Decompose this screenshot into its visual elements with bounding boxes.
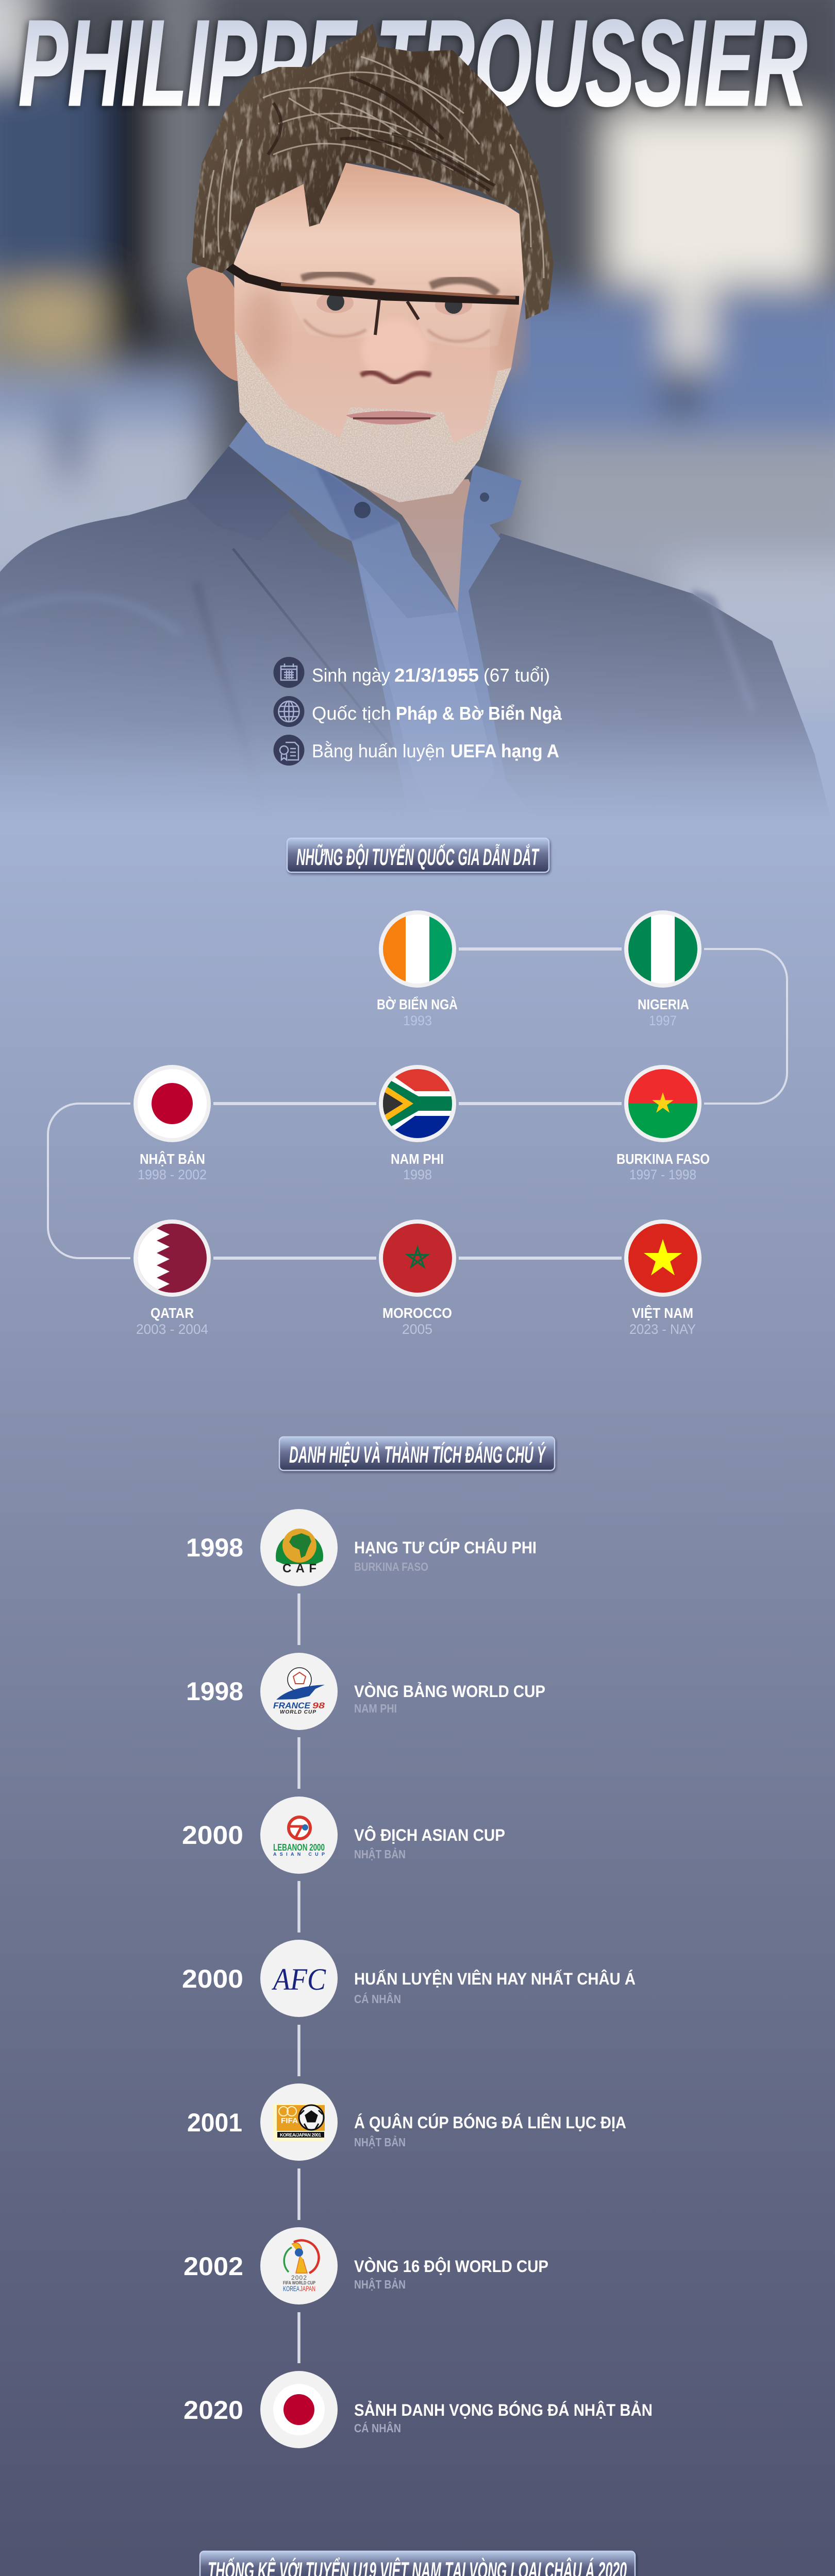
team: Vietnam: VIỆT NAM bbox=[632, 1305, 693, 1321]
team: Morocco: MOROCCO bbox=[382, 1305, 452, 1321]
shirt bbox=[229, 417, 548, 835]
team: Ivory Coast: 1993 bbox=[403, 1013, 432, 1028]
logo: Lebanon 2000: LEBANON 2000 bbox=[273, 1842, 325, 1853]
bio: date of birth bbox=[273, 657, 550, 688]
heading: titles: DANH HIỆU VÀ THÀNH TÍCH ĐÁNG CHÚ Ý bbox=[289, 1442, 546, 1468]
entry: 1998 CAF: BURKINA FASO bbox=[354, 1560, 428, 1573]
team: Nigeria bbox=[624, 910, 702, 1028]
nose and mouth bbox=[361, 318, 428, 382]
team: Qatar: QATAR bbox=[151, 1305, 194, 1321]
team: South Africa: NAM PHI bbox=[391, 1151, 444, 1167]
logo: World Cup 2002: FIFA WORLD CUP bbox=[283, 2280, 315, 2285]
panel: U19 Vietnam statistics bbox=[199, 2550, 638, 2576]
entry: 1998 World Cup: VÒNG BẢNG WORLD CUP bbox=[354, 1682, 545, 1701]
entry: 2002 World Cup: VÒNG 16 ĐỘI WORLD CUP bbox=[354, 2257, 548, 2276]
entry: 2000 Asian Cup bbox=[182, 1797, 505, 1874]
hair bbox=[192, 24, 554, 319]
neck bbox=[361, 479, 490, 613]
logo: World Cup 2002: KOREA bbox=[283, 2284, 299, 2293]
logo: World Cup 2002: JAPAN bbox=[300, 2284, 315, 2293]
bio: coaching licence bbox=[273, 735, 559, 766]
entry: 2001 Confederations Cup: 2001 bbox=[187, 2108, 242, 2137]
heading: titles bbox=[279, 1437, 555, 1470]
bio: coaching licence: UEFA hạng A bbox=[450, 740, 559, 761]
heading: national teams: NHỮNG ĐỘI TUYỂN QUỐC GIA DẪN DẮT bbox=[296, 844, 540, 870]
logo: AFC: AFC bbox=[271, 1962, 326, 1996]
logo: FIFA Confederations Cup 2001: KOREA/JAPAN 2001 bbox=[280, 2132, 321, 2138]
team: Nigeria: NIGERIA bbox=[638, 996, 689, 1012]
fade into page background bbox=[0, 0, 835, 835]
logo: World Cup 2002: 2002 bbox=[291, 2274, 307, 2281]
entry: 2000 Asian Cup: NHẬT BẢN bbox=[354, 1846, 406, 1861]
ear bbox=[187, 267, 242, 381]
logo: CAF: CAF bbox=[282, 1562, 316, 1575]
team: Qatar: 2003 - 2004 bbox=[136, 1321, 208, 1337]
entry: 2000 AFC coach: CÁ NHÂN bbox=[354, 1992, 401, 2006]
logo: FIFA Confederations Cup 2001 bbox=[273, 2104, 325, 2141]
logo: World Cup 2002 bbox=[283, 2240, 319, 2293]
entry: 2000 AFC coach bbox=[182, 1940, 636, 2017]
team: Japan bbox=[133, 1065, 211, 1182]
eyebrows and eyes bbox=[302, 274, 374, 283]
jacket bbox=[0, 446, 835, 835]
bio: date of birth: 21/3/1955 bbox=[394, 665, 479, 686]
entry: 2000 AFC coach: HUẤN LUYỆN VIÊN HAY NHẤT CHÂU Á bbox=[354, 1970, 636, 1988]
panel: titles and achievements timeline bbox=[182, 1436, 653, 2448]
entry: 1998 CAF: 1998 bbox=[186, 1533, 243, 1562]
logo: Lebanon 2000: ASIAN CUP bbox=[273, 1852, 325, 1857]
entry: 1998 World Cup: 1998 bbox=[186, 1677, 243, 1706]
entry: 2020 Japan Hall of Fame: CÁ NHÂN bbox=[354, 2421, 401, 2435]
bio: nationality bbox=[273, 696, 562, 727]
bio: date of birth: (67 tuổi) bbox=[483, 665, 550, 686]
team: Ivory Coast: BỜ BIỂN NGÀ bbox=[377, 996, 458, 1012]
entry: 1998 World Cup bbox=[186, 1653, 545, 1730]
entry: 2002 World Cup: 2002 bbox=[183, 2252, 243, 2281]
logo: France 98: 98 bbox=[312, 1701, 325, 1710]
logo: France 98: WORLD CUP bbox=[280, 1709, 316, 1715]
team: Vietnam bbox=[624, 1219, 702, 1337]
entry: 2001 Confederations Cup: Á QUÂN CÚP BÓNG ĐÁ LIÊN LỤC ĐỊA bbox=[354, 2113, 626, 2132]
team: Burkina Faso bbox=[616, 1065, 710, 1182]
entry: 1998 CAF: HẠNG TƯ CÚP CHÂU PHI bbox=[354, 1538, 537, 1557]
entry: 2002 World Cup: NHẬT BẢN bbox=[354, 2277, 406, 2291]
team: Vietnam: 2023 - NAY bbox=[629, 1321, 696, 1337]
entry: 2020 Japan Hall of Fame: 2020 bbox=[183, 2396, 243, 2425]
beard bbox=[235, 330, 511, 502]
logo: France 98: FRANCE bbox=[273, 1701, 311, 1710]
entry: 2000 Asian Cup: 2000 bbox=[182, 1821, 243, 1850]
connector path bbox=[48, 949, 787, 1258]
face bbox=[234, 163, 524, 502]
entry: 2001 Confederations Cup bbox=[187, 2083, 626, 2161]
entry: 2000 AFC coach: 2000 bbox=[182, 1964, 243, 1993]
logo: FIFA Confederations Cup 2001: FIFA bbox=[281, 2116, 298, 2125]
logo: Japan flag bbox=[273, 2384, 325, 2435]
entry: 1998 World Cup: NAM PHI bbox=[354, 1702, 397, 1715]
heading: statistics bbox=[200, 2551, 635, 2576]
team: Morocco: 2005 bbox=[402, 1321, 432, 1337]
entry: 2020 Japan Hall of Fame bbox=[183, 2371, 653, 2448]
team: Burkina Faso: BURKINA FASO bbox=[616, 1151, 710, 1167]
panel: hero portrait with title and bio bbox=[0, 0, 835, 795]
logo: CAF bbox=[276, 1529, 323, 1575]
heading: national teams bbox=[287, 838, 549, 872]
team: Qatar bbox=[133, 1219, 211, 1337]
entry: 2020 Japan Hall of Fame: SẢNH DANH VỌNG BÓNG ĐÁ NHẬT BẢN bbox=[354, 2401, 653, 2419]
logo: Lebanon 2000 bbox=[273, 1817, 325, 1857]
bio: nationality: Pháp & Bờ Biển Ngà bbox=[396, 703, 562, 724]
glasses bbox=[225, 264, 519, 347]
timeline connectors bbox=[297, 1594, 300, 2363]
logo: France 98 bbox=[273, 1668, 325, 1715]
team: South Africa: 1998 bbox=[403, 1167, 432, 1182]
bio: coaching licence: Bằng huấn luyện bbox=[312, 740, 445, 761]
team: Nigeria: 1997 bbox=[649, 1013, 677, 1028]
panel: national teams coached bbox=[47, 838, 788, 1337]
team: Morocco bbox=[379, 1219, 456, 1337]
portrait: Philippe Troussier bbox=[0, 24, 835, 835]
bio: nationality: Quốc tịch bbox=[312, 703, 391, 724]
team: Burkina Faso: 1997 - 1998 bbox=[629, 1167, 696, 1182]
entry: 2002 World Cup bbox=[183, 2227, 548, 2304]
team: Ivory Coast bbox=[377, 910, 458, 1028]
entry: 2001 Confederations Cup: NHẬT BẢN bbox=[354, 2134, 406, 2149]
team: South Africa bbox=[379, 1065, 456, 1182]
entry: 2000 Asian Cup: VÔ ĐỊCH ASIAN CUP bbox=[354, 1826, 505, 1844]
team: Japan: NHẬT BẢN bbox=[140, 1150, 205, 1167]
bio: date of birth: Sinh ngày bbox=[312, 665, 390, 686]
blurred stadium background bbox=[0, 0, 835, 716]
entry: 1998 CAF bbox=[186, 1509, 537, 1586]
team: Japan: 1998 - 2002 bbox=[138, 1167, 207, 1182]
